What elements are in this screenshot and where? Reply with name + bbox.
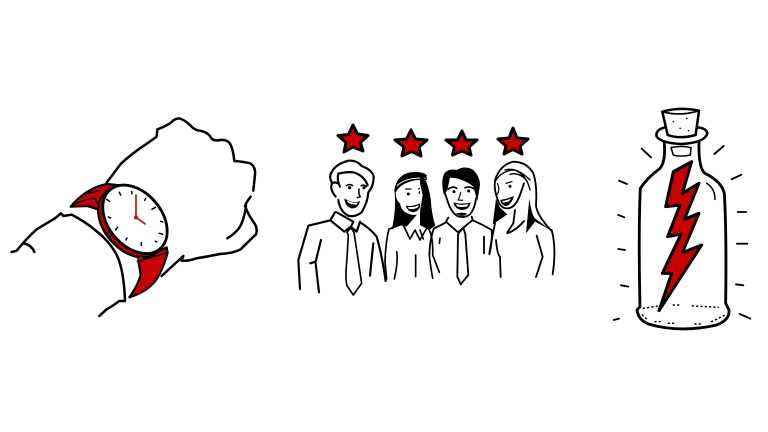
- watch strap bottom: [129, 247, 168, 297]
- woman one mouth: [406, 202, 422, 212]
- cork: [662, 109, 699, 137]
- watch ticks: [107, 192, 163, 245]
- watch hands: [136, 194, 146, 224]
- crown: [107, 232, 111, 237]
- woman two hair: [493, 199, 507, 224]
- highlight: [707, 183, 715, 199]
- man one: [298, 161, 386, 295]
- people group, right pair: [420, 162, 554, 284]
- star 3: [446, 131, 477, 155]
- man two hair: [442, 167, 480, 201]
- woman two mouth: [500, 196, 514, 206]
- woman one: [392, 172, 427, 230]
- people group, left pair: [298, 161, 427, 295]
- fist and arm outline: [12, 118, 257, 316]
- bottle neck ring: [656, 127, 707, 144]
- watch strap top: [71, 184, 122, 210]
- man two face and suit: [429, 192, 492, 284]
- star 4: [498, 128, 528, 154]
- icon: lightning in a bottle: [614, 109, 750, 329]
- watch face: [90, 173, 180, 266]
- icon: hand with wristwatch: [12, 118, 257, 316]
- watch case: [85, 175, 176, 270]
- sand dots: [642, 305, 725, 324]
- man two mouth: [453, 202, 471, 210]
- cork lower: [671, 146, 691, 156]
- star 1: [338, 125, 368, 152]
- icon: four stars: [338, 125, 528, 156]
- bottle body: [637, 142, 729, 329]
- shine rays: [614, 146, 750, 320]
- woman one hair edge: [420, 173, 435, 230]
- man mouth: [344, 198, 360, 208]
- star 2: [395, 130, 427, 156]
- lightning bolt: [659, 162, 702, 311]
